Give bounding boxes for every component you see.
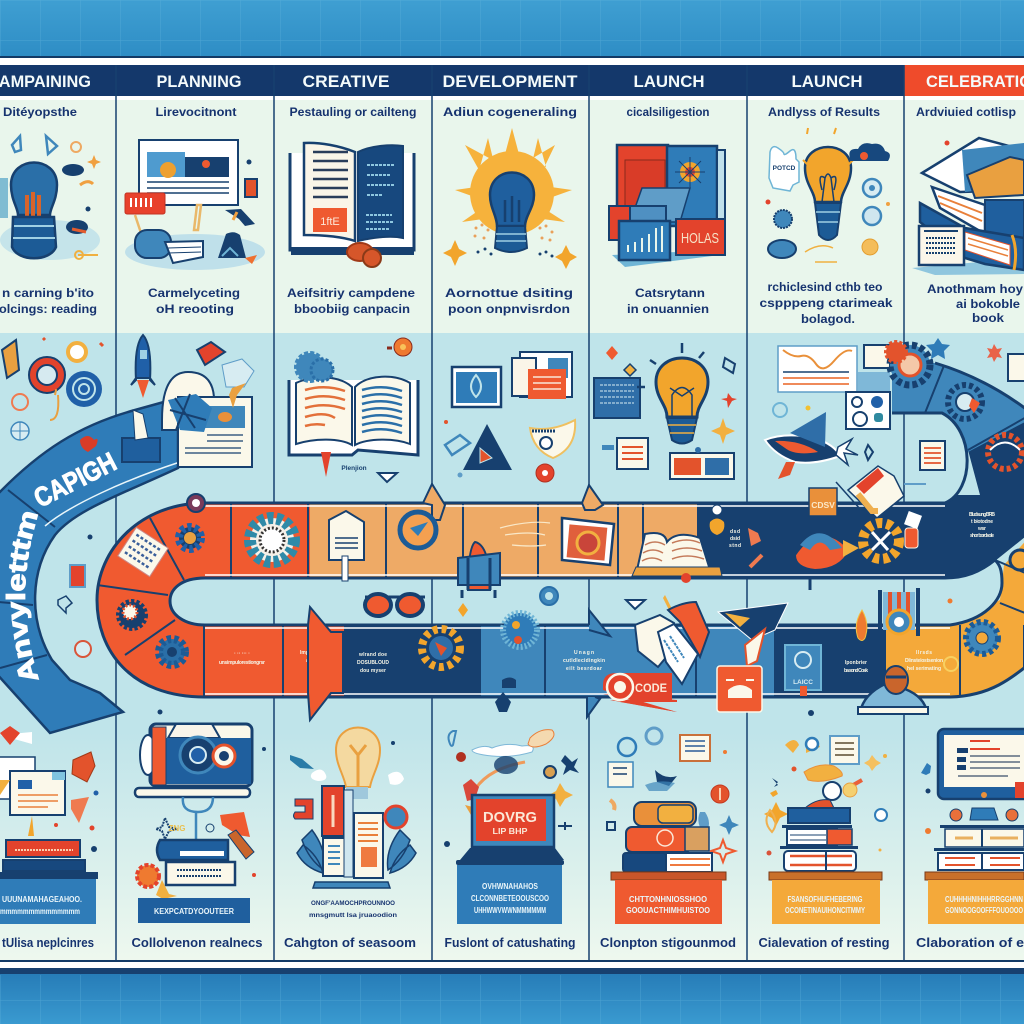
- top descriptions: bboobiig canpacin: [294, 302, 410, 316]
- top subheadings: Adiun cogeneraling: [443, 105, 577, 119]
- top descriptions: n carning b'ito: [2, 286, 94, 300]
- bottom panel column 2: camera and books: [135, 724, 266, 923]
- icon: open book with panel: [290, 143, 414, 267]
- column dividers: [116, 65, 904, 960]
- middle icons column 1: [2, 338, 103, 440]
- header bar: CREATIVE: [302, 72, 390, 91]
- lower road icons: CODE: [635, 681, 667, 695]
- top subheadings: [3, 105, 1016, 119]
- bottom panel column 6: book stack: FSANSOFHUFHEBERING: [788, 895, 862, 904]
- icon: campaign card and speech bubble: [122, 342, 254, 467]
- bottom captions: Cialevation of resting: [758, 935, 890, 950]
- bottom captions: Collolvenon realnecs: [132, 935, 262, 950]
- winding road: wsr: [977, 526, 986, 532]
- icon: stacked book covers and chart: HOLAS: [681, 230, 719, 247]
- icon: rocket column 2: [131, 335, 155, 398]
- winding road: Dlinsteiostsenion: [905, 658, 943, 664]
- rocket and sunglasses: [365, 522, 550, 617]
- upper road icons left: [58, 494, 436, 714]
- bottom panel column 1: [0, 726, 98, 924]
- winding road: t biotodne: [971, 519, 993, 525]
- icon: orange bulb analysis: POTCD: [773, 165, 796, 172]
- header bar: [0, 65, 1024, 100]
- bottom panel column 5: book stack: CHTTONHNIOSSHOO: [629, 895, 707, 904]
- winding road: llrsds: [916, 650, 932, 656]
- winding road: a Bod: [306, 658, 318, 664]
- top descriptions: rchiclesind cthb teo: [768, 280, 882, 294]
- icon: orange bulb analysis: [766, 128, 890, 262]
- winding road: dou myser: [360, 668, 386, 674]
- winding road: shor bordsole: [970, 533, 994, 539]
- bottom panel column 6: book stack: OCONETINAUIHONCITMMY: [785, 906, 866, 915]
- winding road: [90, 355, 1024, 705]
- top descriptions: [0, 280, 1023, 326]
- icon: bulb with decorations: [0, 136, 101, 260]
- bottom panel column 1: UUUNAMAHAGEAHOO.: [2, 895, 82, 904]
- winding road: eilt besrdoar: [566, 666, 602, 672]
- bottom panel column 5: book stack: GOOUACTHIMHUISTOO: [626, 906, 710, 915]
- upper road icons right: CDSV: [811, 500, 835, 510]
- bottom panel column 4: laptop: LIP BHP: [492, 827, 528, 836]
- bottom captions: tUlisa neplcinres: [2, 935, 94, 950]
- icon: open book middle: [289, 338, 418, 482]
- bottom panel column 2: camera and books: ZNG: [169, 824, 185, 833]
- winding road: unsimpulorestiongrsr: [219, 660, 265, 666]
- bottom panel column 4: laptop: DOVRG: [483, 809, 537, 826]
- bottom panel column 4: laptop: OVHWNAHAHOS: [482, 882, 539, 891]
- winding road: Impsation: [300, 650, 324, 656]
- winding road: dsid: [730, 536, 740, 542]
- bottom panel column 4: laptop: UHHWWVWWNMMMMMM: [474, 906, 546, 915]
- icon: stacked book covers and chart: [609, 145, 725, 267]
- top subheadings: Ardviuied cotlisp: [916, 105, 1016, 119]
- bottom captions: Cahgton of seasoom: [284, 935, 416, 950]
- bottom panel column 3: bulb, plants and books: ONGF'AAMOCHPROUNNOO: [311, 900, 395, 907]
- winding road: dsd: [730, 529, 740, 535]
- top subheadings: Andlyss of Results: [768, 105, 880, 119]
- header bar: PLANNING: [156, 72, 242, 91]
- winding road: ba sond Cosk: [844, 668, 868, 674]
- top descriptions: Aornottue dsiting: [445, 286, 573, 300]
- top descriptions: oH reooting: [156, 302, 234, 316]
- top descriptions: bolagod.: [801, 312, 855, 326]
- arrow spikes on road: [308, 484, 610, 720]
- top subheadings: cicalsiligestion: [626, 105, 710, 119]
- bottom panel column 4: laptop: CLCONNBETEOOUSCOO: [471, 894, 549, 903]
- lower road icons: LAICC: [793, 679, 813, 686]
- top subheadings: Ditéyopsthe: [3, 105, 77, 119]
- bottom captions: [2, 935, 1024, 950]
- icon: sun and blue bulb: [443, 128, 577, 269]
- top descriptions: Carmelyceting: [148, 286, 240, 300]
- winding road: wlrand doe: [358, 652, 387, 658]
- top descriptions: Anothmam hoy: [927, 282, 1023, 296]
- top descriptions: Catsrytann: [635, 286, 705, 300]
- winding road: Bludsung BRB: [969, 512, 995, 518]
- bottom panel column 4: laptop: [444, 730, 579, 924]
- upper road icons right: [540, 466, 952, 610]
- top descriptions: cspppeng ctarimeak: [760, 296, 893, 310]
- bottom panel column 2: camera and books: KEXPCATDYOOUTEER: [154, 907, 234, 916]
- top descriptions: Aeifsitriy campdene: [287, 286, 415, 300]
- top descriptions: poon onpnvisrdon: [448, 302, 570, 316]
- winding road: cutldlecidingkin: [563, 658, 605, 664]
- header bar: LAUNCH: [634, 72, 704, 91]
- middle icons column 5: [594, 343, 737, 479]
- bottom panel column 7: computer and books: [921, 729, 1024, 924]
- bottom panel column 3: bulb, plants and books: mnsgmutt lsa jruaoodion: [309, 912, 397, 919]
- winding road: stnd: [729, 543, 741, 549]
- bottom captions: Clonpton stigounmod: [600, 935, 736, 950]
- winding road: · ·· ··· ·: [234, 651, 250, 657]
- bottom panel column 5: book stack: [607, 728, 739, 924]
- bottom captions: Fuslont of catushating: [444, 935, 576, 950]
- lower road icons: [422, 550, 1024, 716]
- left curved arrow banner: [0, 401, 180, 734]
- top subheadings: Pestauling or cailteng: [290, 105, 416, 119]
- winding road: Iponbrier: [845, 660, 867, 666]
- bottom panel column 1: mmmmmmmmmmmmmm: [0, 907, 80, 916]
- header bar: LAUNCH: [792, 72, 862, 91]
- bottom panel column 6: book stack: [764, 736, 887, 924]
- top descriptions: ai bokoble: [956, 297, 1020, 311]
- icon: open book middle: Plenjion: [341, 465, 367, 472]
- icon: presentation monitor: [125, 140, 265, 270]
- middle icons column 6: chart, gears and rocket: [765, 342, 945, 484]
- top descriptions: in onuannien: [627, 302, 709, 316]
- top descriptions: olcings: reading: [0, 302, 97, 316]
- icon: book pile: [912, 138, 1024, 275]
- banner label: Capigh: CAPIGH: [29, 447, 121, 513]
- icon: open book with panel: 1ftE: [320, 216, 340, 228]
- header bar: DEVELOPMENT: [442, 72, 578, 91]
- banner label: Anvyletttm: Anvyletttm: [6, 512, 40, 680]
- top descriptions: book: [972, 311, 1004, 325]
- winding road: Unagn: [574, 650, 594, 656]
- top subheadings: Lirevocitnont: [156, 105, 236, 119]
- winding road: DOSUBLOUD: [357, 660, 389, 666]
- gears on upper right band: [926, 338, 1024, 469]
- winding road: hel serimating: [907, 666, 941, 672]
- middle icons column 4: [444, 352, 575, 482]
- bottom panel column 3: bulb, plants and books: [290, 728, 416, 919]
